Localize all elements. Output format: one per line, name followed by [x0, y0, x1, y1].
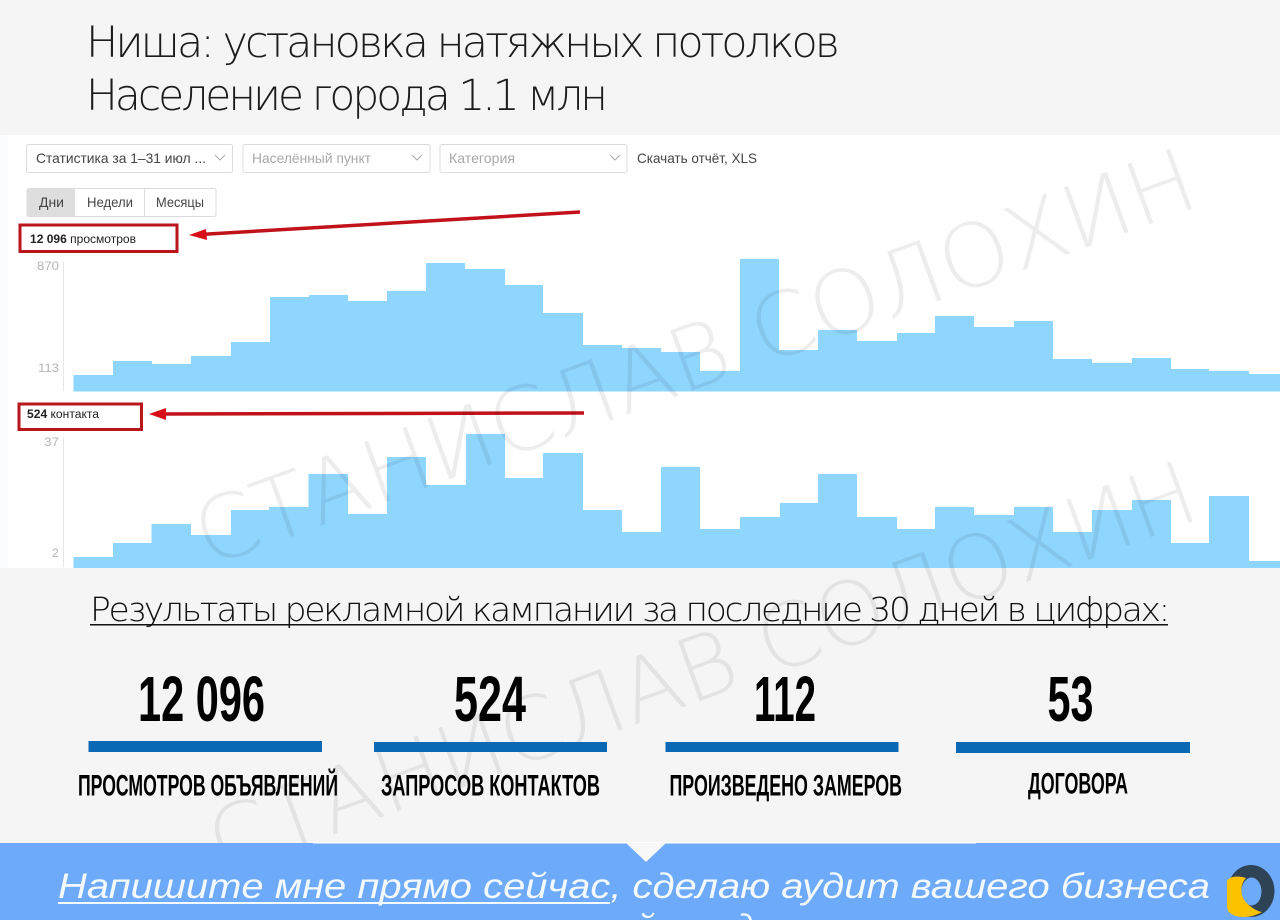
title: Ниша: установка натяжных потолков: [86, 18, 837, 68]
filter: period dropdown: Статистика за 1–31 июл ...: [36, 150, 206, 166]
chart: contacts per day: 37: [44, 435, 59, 449]
watermark: lower: СТАНИСЛАВ СОЛОХИН: [194, 441, 1210, 895]
filter: category dropdown: [440, 144, 627, 172]
callout: views total: [20, 225, 177, 252]
stat: contracts: [956, 663, 1190, 800]
icon: logo: [1227, 865, 1274, 917]
stat: contracts: ДОГОВОРА: [1028, 768, 1128, 800]
period tabs: Дни: [39, 194, 64, 210]
chart: views per day: 870: [37, 259, 59, 273]
download link: Скачать отчёт, XLS: [637, 150, 757, 166]
stat: measurements: [666, 663, 902, 802]
filter: locality dropdown: [243, 144, 430, 172]
filter: period dropdown: [26, 144, 232, 172]
chart: views per day: 113: [38, 361, 59, 375]
stat: measurements: ПРОИЗВЕДЕНО ЗАМЕРОВ: [670, 770, 902, 802]
callout: views total: 12 096 просмотров: [30, 232, 136, 246]
title: Население города 1.1 млн: [86, 71, 605, 121]
stat: contact requests: ЗАПРОСОВ КОНТАКТОВ: [381, 770, 600, 802]
period tabs: [27, 188, 216, 216]
filter: category dropdown: Категория: [449, 150, 515, 166]
arrow: views: [189, 212, 580, 240]
title: [86, 18, 837, 121]
panel: statistics screenshot: [0, 135, 1280, 568]
chart: views per day: [37, 259, 1280, 392]
call to action text: Напишите мне прямо сейчас, сделаю аудит вашего бизнеса: [58, 867, 1210, 906]
heading: campaign results: Результаты рекламной кампании за последние 30 дней в цифрах:: [90, 590, 1168, 629]
stat: contact requests: [374, 663, 607, 802]
pointer notch: [626, 843, 666, 862]
watermark: upper: СТАНИСЛАВ СОЛОХИН: [180, 128, 1209, 587]
stat: views: ПРОСМОТРОВ ОБЪЯВЛЕНИЙ: [78, 768, 338, 802]
chart: contacts per day: 2: [52, 546, 59, 560]
stat: contact requests: 524: [454, 663, 526, 735]
stat: measurements: 112: [754, 663, 816, 735]
arrow: contacts: [149, 408, 584, 420]
stat: views: 12 096: [138, 663, 265, 735]
period tabs: Недели: [87, 194, 133, 210]
callout: contacts total: 524 контакта: [27, 409, 100, 421]
chart: contacts per day: [44, 434, 1280, 568]
callout: contacts total: [19, 404, 142, 430]
footer banner: [0, 842, 1280, 920]
stat: views: [78, 663, 338, 802]
period tabs: Месяцы: [156, 194, 204, 210]
filter: locality dropdown: Населённый пункт: [252, 150, 372, 166]
stat: contracts: 53: [1048, 663, 1094, 735]
